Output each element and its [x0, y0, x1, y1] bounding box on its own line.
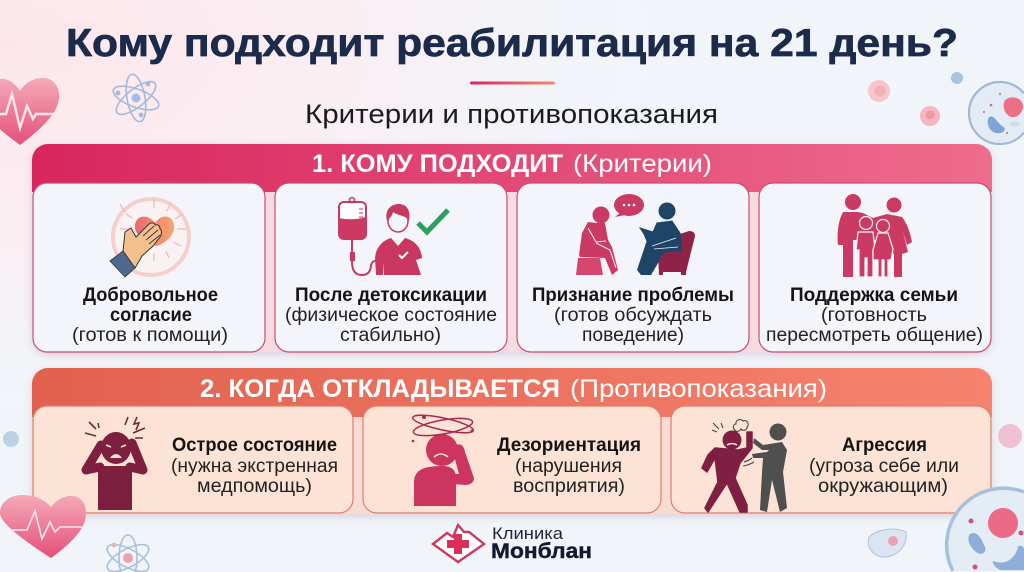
icon: aggressive scene: [702, 420, 787, 512]
logo: clinic: [433, 524, 592, 563]
decoration: large microbe cell bottom right: [947, 488, 1024, 571]
panel header band: [32, 368, 992, 417]
card text: Добровольное: [83, 285, 218, 306]
icon: logo mark: [433, 525, 484, 562]
card text: Признание проблемы: [532, 285, 734, 306]
decoration: blood cell blob: [868, 529, 906, 557]
panel: contraindications: [32, 368, 992, 514]
card text: [171, 435, 338, 497]
title divider: [470, 82, 555, 84]
card text: [532, 285, 734, 346]
card: voluntary consent: [33, 183, 265, 352]
panel: criteria: [32, 144, 992, 352]
decoration: heart bottom left: [0, 495, 86, 558]
decoration: pink cells top right: [868, 72, 963, 126]
decoration: atom bottom: [103, 535, 153, 572]
panel heading: (Критерии): [573, 150, 712, 178]
card text: (готов к помощи): [72, 325, 228, 346]
card text: восприятия): [513, 476, 625, 497]
title: Кому подходит реабилитация на 21 день?: [66, 22, 958, 65]
card: after detox: [275, 183, 507, 352]
icon: IV drip and patient: [339, 198, 448, 275]
icon: family: [838, 194, 912, 277]
panel heading: (Противопоказания): [570, 375, 827, 403]
decoration: side dots: [3, 424, 1022, 448]
card text: Острое состояние: [172, 435, 337, 456]
card text: поведение): [582, 325, 684, 346]
decoration: heart top left: [0, 78, 59, 145]
card text: [766, 285, 983, 346]
card text: (нужна экстренная: [171, 456, 338, 477]
panel heading: 1. КОМУ ПОДХОДИТ: [312, 150, 563, 178]
decoration: atom top: [110, 73, 162, 123]
subtitle: Критерии и противопоказания: [305, 99, 718, 129]
card text: (нарушения: [515, 456, 622, 477]
card: disorientation: [363, 406, 661, 513]
card: aggression: [671, 406, 991, 513]
icon: therapy conversation: [576, 194, 695, 275]
card text: пересмотреть общение): [766, 325, 983, 346]
icon: hand on heart: [110, 199, 189, 277]
card text: (готовность: [821, 305, 927, 326]
panel header band: [32, 144, 992, 192]
card text: стабильно): [340, 325, 441, 346]
card: acute state: [33, 406, 353, 513]
panel background: [32, 144, 992, 352]
card text: окружающим): [818, 476, 948, 497]
card text: Агрессия: [842, 435, 927, 456]
decoration: microbe cell top right: [969, 82, 1024, 144]
card: admitting the problem: [517, 183, 749, 352]
icon: person in acute distress: [85, 417, 145, 510]
card: family support: [759, 183, 991, 352]
card text: медпомощь): [197, 476, 312, 497]
card text: (физическое состояние: [285, 305, 497, 326]
card text: [72, 285, 228, 346]
panel heading: 2. КОГДА ОТКЛАДЫВАЕТСЯ: [200, 375, 560, 403]
card text: После детоксикации: [295, 285, 487, 306]
logo text: Клиника: [492, 524, 564, 543]
card text: (готов обсуждать: [554, 305, 712, 326]
card text: [497, 435, 641, 497]
logo: clinic: Монблан: [491, 540, 592, 563]
card text: согласие: [110, 305, 192, 326]
card text: [809, 435, 959, 497]
panel background: [32, 368, 992, 514]
card text: [285, 285, 497, 346]
card text: (угроза себе или: [809, 456, 959, 477]
card text: Поддержка семьи: [790, 285, 958, 306]
card text: Дезориентация: [497, 435, 641, 456]
icon: dizzy person: [411, 412, 475, 506]
